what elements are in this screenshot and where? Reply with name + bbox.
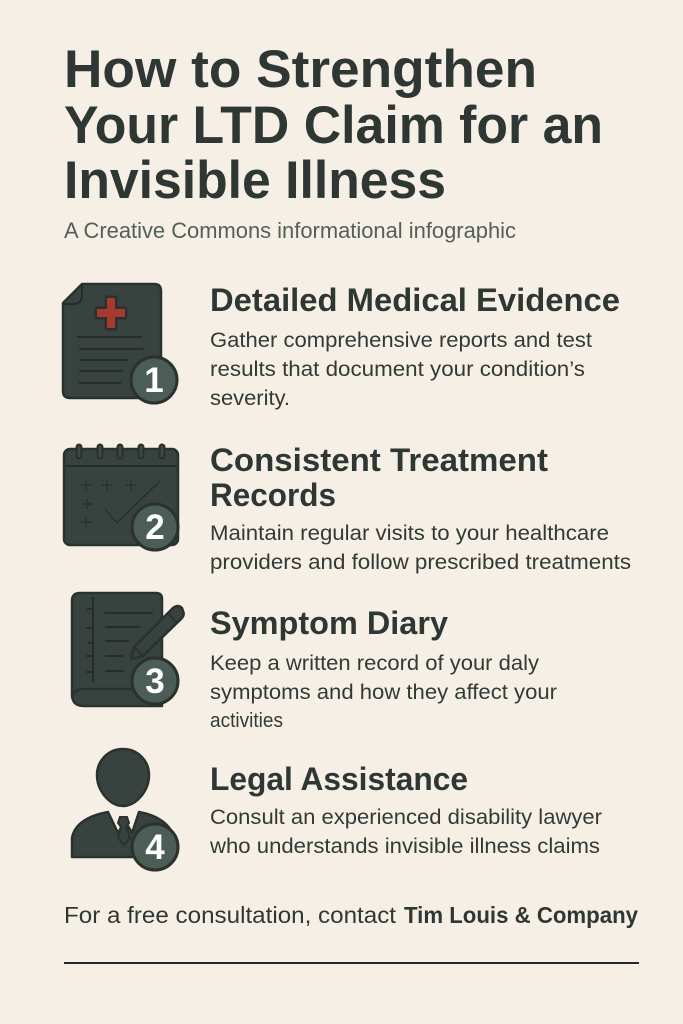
description: Consult an experienced disability lawyer [210,805,602,829]
icon: diary and pencil with badge 3 [72,593,184,706]
description: Gather comprehensive reports and test [210,328,592,352]
description [210,328,592,410]
icon: calendar with badge 2: 2 [145,508,165,547]
icon: diary and pencil with badge 3: 3 [145,662,165,701]
icon: calendar with badge 2 [64,447,178,550]
icon: person in suit with badge 4 [72,749,178,870]
description [209,805,602,858]
heading: Symptom Diary [210,605,448,641]
description: severity. [210,386,290,410]
step 4: legal assistance [72,749,602,870]
description: activities [210,709,283,732]
description: Keep a written record of your daly [210,651,539,675]
description: symptoms and how they affect your [210,680,557,704]
subtitle: A Creative Commons informational infographic [64,218,516,243]
title: How to Strengthen [64,40,537,99]
footer call to action [64,902,638,928]
title [64,40,603,210]
icon: medical document with badge 1 [63,284,177,403]
title: Your LTD Claim for an [64,96,603,155]
step 2: consistent treatment records [64,442,631,574]
description: Maintain regular visits to your healthcare [210,521,609,545]
step 1: detailed medical evidence [63,282,620,410]
description: results that document your condition’s [210,357,585,381]
description [210,651,557,732]
heading: Detailed Medical Evidence [210,282,620,318]
heading: Legal Assistance [210,761,468,797]
footer call to action: Tim Louis & Company [404,902,638,928]
description: who understands invisible illness claims [209,834,600,858]
step 3: symptom diary [72,593,557,732]
description [210,521,631,574]
footer call to action: For a free consultation, contact [64,902,397,928]
title: Invisible Illness [64,151,446,210]
heading: Records [210,477,336,513]
heading [210,442,548,513]
description: providers and follow prescribed treatments [210,550,631,574]
heading: Consistent Treatment [210,442,548,478]
icon: person in suit with badge 4: 4 [145,828,165,867]
icon: medical document with badge 1: 1 [144,361,164,400]
